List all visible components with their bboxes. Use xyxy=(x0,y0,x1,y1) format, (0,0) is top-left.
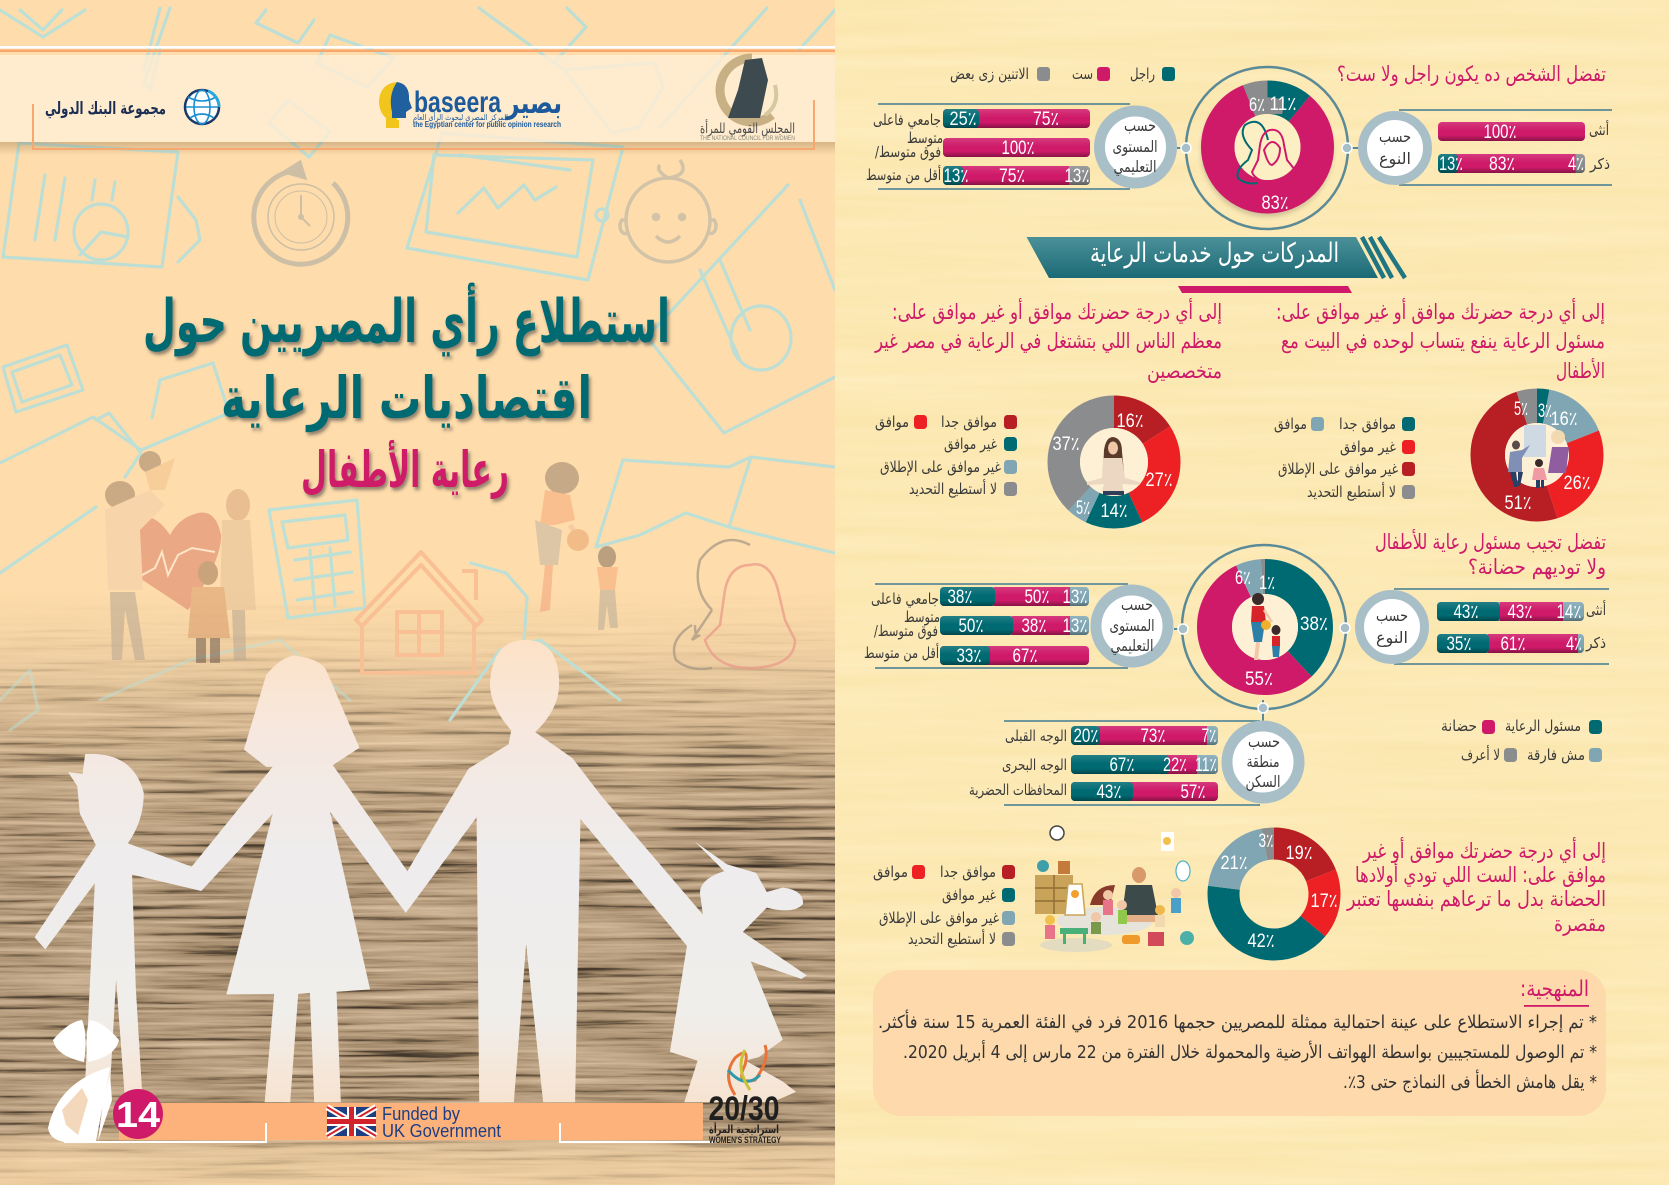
donut chart: caregivers not specialized: 14٪ xyxy=(1100,501,1128,522)
methodology bullets: * يقل هامش الخطأ فى النماذج حتى 3٪. xyxy=(1343,1069,1597,1093)
gender breakdown: question 1: 13٪ xyxy=(1439,154,1463,175)
legend: caregivers not specialized: موافق xyxy=(875,413,909,431)
legend: caregiver alone with children: موافق جدا xyxy=(1339,415,1396,433)
donut chart: question 5: 3٪ xyxy=(1258,831,1274,852)
legend: question 1: الاتنين زى بعض xyxy=(950,65,1029,83)
logo: World Bank Group xyxy=(45,90,219,124)
icon: woman shrugging xyxy=(1087,437,1140,495)
gender breakdown: question 4: النوع xyxy=(1376,628,1408,648)
donut chart: question 5: 17٪ xyxy=(1310,891,1338,912)
logo: Baseera: the Egyptian center for public opinion research xyxy=(413,119,561,129)
education breakdown: question 1: جامعي فاعلى xyxy=(873,111,941,130)
title: اقتصاديات الرعاية xyxy=(221,364,592,433)
gender breakdown: question 4: أنثى xyxy=(1586,600,1606,619)
region breakdown: question 4: الوجه البحرى xyxy=(1002,756,1067,774)
illustration: faded mother and child xyxy=(535,462,618,630)
education breakdown: question 4: 38٪ xyxy=(1022,616,1046,637)
region breakdown: question 4: حسب xyxy=(1248,732,1280,751)
donut chart: caregivers not specialized: 27٪ xyxy=(1146,470,1172,491)
methodology bullets xyxy=(878,1009,1597,1093)
donut chart: caregiver alone with children: 51٪ xyxy=(1504,493,1532,514)
donut chart: question 5: 19٪ xyxy=(1286,843,1312,864)
methodology bullets: * تم إجراء الاستطلاع على عينة احتمالية ممثلة للمصريين حجمها 2016 فرد في الفئة العمرية 15 سنة فأكثر. xyxy=(878,1009,1597,1033)
question 1 heading: تفضل الشخص ده يكون راجل ولا ست؟ xyxy=(1337,62,1606,86)
panel: cover xyxy=(0,0,835,1185)
legend: question 5: غير موافق xyxy=(942,886,996,904)
subtitle: رعاية الأطفال xyxy=(301,439,509,499)
gender breakdown: question 1: حسب xyxy=(1379,127,1411,146)
education breakdown: question 4: جامعي فاعلى xyxy=(871,590,939,609)
education breakdown: question 4: 67٪ xyxy=(1012,646,1038,667)
icon: women outline xyxy=(674,540,795,669)
education breakdown: question 1: 100٪ xyxy=(1002,138,1034,159)
legend: caregiver alone with children: غير موافق xyxy=(1340,438,1396,456)
header band xyxy=(0,46,835,155)
gender breakdown: question 1: 83٪ xyxy=(1489,154,1515,175)
education breakdown: question 1: المستوى xyxy=(1112,137,1158,157)
education breakdown: question 1: التعليمي xyxy=(1114,157,1156,177)
title: استطلاع رأي المصريين حول xyxy=(143,282,670,357)
education breakdown: question 1: 75٪ xyxy=(1033,109,1059,130)
education breakdown: question 4: المستوى xyxy=(1110,616,1154,636)
logo: National Council for Women: THE NATIONAL COUNCIL FOR WOMEN xyxy=(700,135,795,142)
funded by text xyxy=(382,1104,501,1141)
donut chart: caregivers not specialized xyxy=(1052,411,1172,522)
legend: question 5: غير موافق على الإطلاق xyxy=(879,909,999,927)
sketch icons background xyxy=(0,8,835,730)
region breakdown: question 4: 67٪ xyxy=(1110,755,1134,776)
section banner: المدركات حول خدمات الرعاية xyxy=(1090,238,1339,269)
funded by text: Funded by xyxy=(382,1104,460,1124)
donut chart: caregiver alone with children: 3٪ xyxy=(1538,401,1552,422)
donut chart: caregiver alone with children xyxy=(1488,399,1590,514)
region breakdown: question 4: 20٪ xyxy=(1074,726,1098,747)
donut chart: question 5: 42٪ xyxy=(1248,931,1274,952)
legend: caregiver alone with children: غير موافق على الإطلاق xyxy=(1278,460,1398,478)
region breakdown: question 4: 73٪ xyxy=(1140,726,1166,747)
legend: question 5: موافق جدا xyxy=(940,863,996,881)
question 3 text: left: معظم الناس اللي بتشتغل في الرعاية في مصر غير xyxy=(874,329,1222,354)
question 4 heading: ولا توديهم حضانة؟ xyxy=(1468,555,1606,580)
region breakdown: question 4 xyxy=(969,700,1299,805)
logo: 2030 women's strategy xyxy=(708,1045,781,1145)
education breakdown: question 4: متوسط xyxy=(904,608,940,626)
logo: National Council for Women xyxy=(700,58,795,142)
legend: caregiver alone with children: موافق xyxy=(1274,415,1307,433)
donut chart: question 1 xyxy=(1186,67,1348,229)
panel: methodology xyxy=(873,970,1606,1116)
donut chart: caregiver alone with children: 5٪ xyxy=(1514,399,1528,420)
education breakdown: question 1: متوسط xyxy=(907,129,943,147)
donut chart: caregivers not specialized: 5٪ xyxy=(1076,498,1090,519)
logo: Baseera: بصير xyxy=(504,86,562,121)
education breakdown: question 1: 75٪ xyxy=(999,166,1025,187)
education breakdown: question 4: 33٪ xyxy=(956,646,982,667)
methodology bullets: * تم الوصول للمستجيبين بواسطة الهواتف الأرضية والمحمولة خلال الفترة من 22 مارس إلى 4 أبريل 2020. xyxy=(903,1040,1597,1063)
donut chart: caregivers not specialized: 16٪ xyxy=(1116,411,1144,432)
legend: question 1 xyxy=(950,65,1175,83)
logo: 2030 women's strategy: استراتيجية المرأة xyxy=(709,1122,779,1136)
donut chart: question 4: 6٪ xyxy=(1235,568,1251,589)
title xyxy=(143,282,670,433)
gender breakdown: question 1: 4٪ xyxy=(1568,154,1584,175)
icon: clock xyxy=(254,162,348,264)
legend: caregivers not specialized: موافق جدا xyxy=(941,413,997,431)
region breakdown: question 4: 22٪ xyxy=(1163,755,1187,776)
education breakdown: question 1 xyxy=(866,104,1191,189)
illustration: nursery classroom xyxy=(1035,826,1194,952)
gender breakdown: question 4: 35٪ xyxy=(1446,634,1472,655)
gender breakdown: question 1 xyxy=(1342,110,1612,185)
gender breakdown: question 1: ذكر xyxy=(1589,155,1610,173)
legend: question 4: مش فارقة xyxy=(1527,746,1585,764)
gender breakdown: question 4: ذكر xyxy=(1585,634,1606,652)
region breakdown: question 4: 57٪ xyxy=(1180,782,1206,803)
legend: question 5: موافق xyxy=(873,863,908,881)
region breakdown: question 4: السكن xyxy=(1246,772,1280,792)
logo: 2030 women's strategy: WOMEN'S STRATEGY xyxy=(709,1135,781,1145)
logo: series mark xyxy=(48,1020,119,1143)
donut chart: caregivers not specialized: 37٪ xyxy=(1052,434,1080,455)
education breakdown: question 4: أقل من متوسط xyxy=(864,643,939,662)
legend: caregiver alone with children xyxy=(1274,415,1415,501)
legend: caregivers not specialized: لا أستطيع التحديد xyxy=(909,479,997,498)
logo: National Council for Women: المجلس القومي للمرأة xyxy=(700,119,795,137)
donut chart: question 4 xyxy=(1182,545,1346,709)
gender breakdown: question 1: النوع xyxy=(1379,149,1411,169)
education breakdown: question 4 xyxy=(864,584,1188,668)
logo: Baseera xyxy=(379,82,562,129)
donut chart: question 1: 11٪ xyxy=(1270,94,1296,115)
gender breakdown: question 4: 4٪ xyxy=(1566,634,1582,655)
icon: house xyxy=(356,552,482,673)
education breakdown: question 4: 13٪ xyxy=(1062,587,1088,608)
illustration: faded family with heart xyxy=(105,451,256,663)
education breakdown: question 4: 13٪ xyxy=(1062,616,1088,637)
donut chart: question 4: 38٪ xyxy=(1300,614,1328,635)
methodology heading: المنهجية: xyxy=(1520,977,1589,1002)
legend: question 1: راجل xyxy=(1130,65,1155,83)
issue number xyxy=(113,1089,163,1139)
paper-cut family xyxy=(35,640,807,1102)
question 5 text xyxy=(1346,837,1606,936)
logo: World Bank Group: مجموعة البنك الدولي xyxy=(45,99,166,119)
question 3 text: left xyxy=(874,298,1222,383)
legend: question 1: ست xyxy=(1072,65,1093,83)
region breakdown: question 4: الوجه القبلى xyxy=(1005,727,1067,745)
legend: question 4: مسئول الرعاية xyxy=(1505,717,1581,735)
question 5 text: موافق على: الست اللي تودي أولادها xyxy=(1355,861,1606,887)
legend: question 4: لا أعرف xyxy=(1461,745,1500,764)
gender breakdown: question 4: 43٪ xyxy=(1508,602,1532,623)
gender breakdown: question 4: 14٪ xyxy=(1556,602,1582,623)
legend: question 5: لا أستطيع التحديد xyxy=(908,929,996,948)
education breakdown: question 1: أقل من متوسط xyxy=(866,165,941,184)
donut chart: question 1: 6٪ xyxy=(1249,95,1265,116)
funded by text: UK Government xyxy=(382,1121,501,1141)
panel: survey results xyxy=(835,0,1669,1185)
icon: UK flag xyxy=(327,1107,376,1136)
question 3 text: left: إلى أي درجة حضرتك موافق أو غير موافق على: xyxy=(892,298,1222,325)
legend: caregiver alone with children: لا أستطيع التحديد xyxy=(1307,482,1396,501)
education breakdown: question 1: 13٪ xyxy=(1064,166,1090,187)
donut chart: question 5 xyxy=(1220,831,1338,952)
legend: caregivers not specialized: غير موافق xyxy=(944,435,997,453)
question 5 text: إلى أي درجة حضرتك موافق أو غير xyxy=(1362,837,1606,864)
logo: 2030 women's strategy: 20/30 xyxy=(708,1090,780,1128)
gender breakdown: question 4: 61٪ xyxy=(1500,634,1526,655)
donut chart: caregiver alone with children: 16٪ xyxy=(1550,409,1578,430)
gender breakdown: question 4: 43٪ xyxy=(1454,602,1478,623)
icon: mother and child xyxy=(1251,593,1280,660)
logo: Baseera: baseera xyxy=(414,86,501,119)
region breakdown: question 4: المحافظات الحضرية xyxy=(969,781,1067,799)
education breakdown: question 4: حسب xyxy=(1121,595,1153,614)
question 4 heading: تفضل تجيب مسئول رعاية للأطفال xyxy=(1375,529,1606,554)
peach fade over wood xyxy=(0,590,835,1185)
education breakdown: question 1: 25٪ xyxy=(950,109,976,130)
donut chart: question 4: 1٪ xyxy=(1259,573,1275,594)
donut chart: question 5: 21٪ xyxy=(1220,853,1248,874)
icon: caregiver and child xyxy=(1508,425,1569,488)
icon: women outline xyxy=(1237,122,1295,183)
issue number: 14 xyxy=(116,1094,160,1135)
gender breakdown: question 1: أنثى xyxy=(1589,120,1609,139)
legend: question 4 xyxy=(1441,717,1602,764)
question 3 text: left: متخصصين xyxy=(1147,359,1222,383)
region breakdown: question 4: 7٪ xyxy=(1202,726,1216,747)
gender breakdown: question 4: حسب xyxy=(1376,606,1408,625)
education breakdown: question 4: 50٪ xyxy=(1024,587,1050,608)
question 4 heading xyxy=(1375,529,1606,580)
footer bar xyxy=(64,1103,713,1142)
region breakdown: question 4: 11٪ xyxy=(1195,755,1217,776)
education breakdown: question 4: 38٪ xyxy=(948,587,972,608)
legend: caregivers not specialized xyxy=(875,413,1017,498)
legend: question 4: حضانة xyxy=(1441,717,1477,735)
question 2 text: right xyxy=(1276,298,1605,383)
gender breakdown: question 1: 100٪ xyxy=(1484,122,1516,143)
gender breakdown: question 4 xyxy=(1340,589,1609,664)
education breakdown: question 4: التعليمي xyxy=(1110,636,1154,656)
legend: question 5 xyxy=(873,863,1015,948)
education breakdown: question 1: حسب xyxy=(1124,116,1156,135)
education breakdown: question 4: فوق متوسط/ xyxy=(874,622,938,640)
section banner xyxy=(1026,237,1405,293)
question 5 text: الحضانة بدل ما ترعاهم بنفسها تعتبر xyxy=(1346,887,1606,912)
region breakdown: question 4: 43٪ xyxy=(1096,782,1122,803)
education breakdown: question 1: فوق متوسط/ xyxy=(875,143,941,161)
education breakdown: question 4: 50٪ xyxy=(958,616,984,637)
legend: caregivers not specialized: غير موافق على الإطلاق xyxy=(880,458,1001,476)
question 2 text: right: الأطفال xyxy=(1556,358,1605,383)
donut chart: question 1: 83٪ xyxy=(1262,193,1288,214)
icon: baby face xyxy=(620,160,716,262)
question 5 text: مقصرة xyxy=(1554,912,1606,936)
logo: Baseera: المركز المصرى لبحوث الرأى العام xyxy=(413,112,508,122)
region breakdown: question 4: منطقة xyxy=(1246,752,1280,771)
education breakdown: question 1: 13٪ xyxy=(944,166,968,187)
donut chart: caregiver alone with children: 26٪ xyxy=(1564,473,1590,494)
wood texture xyxy=(0,590,835,1185)
donut chart: question 4: 55٪ xyxy=(1245,669,1273,690)
